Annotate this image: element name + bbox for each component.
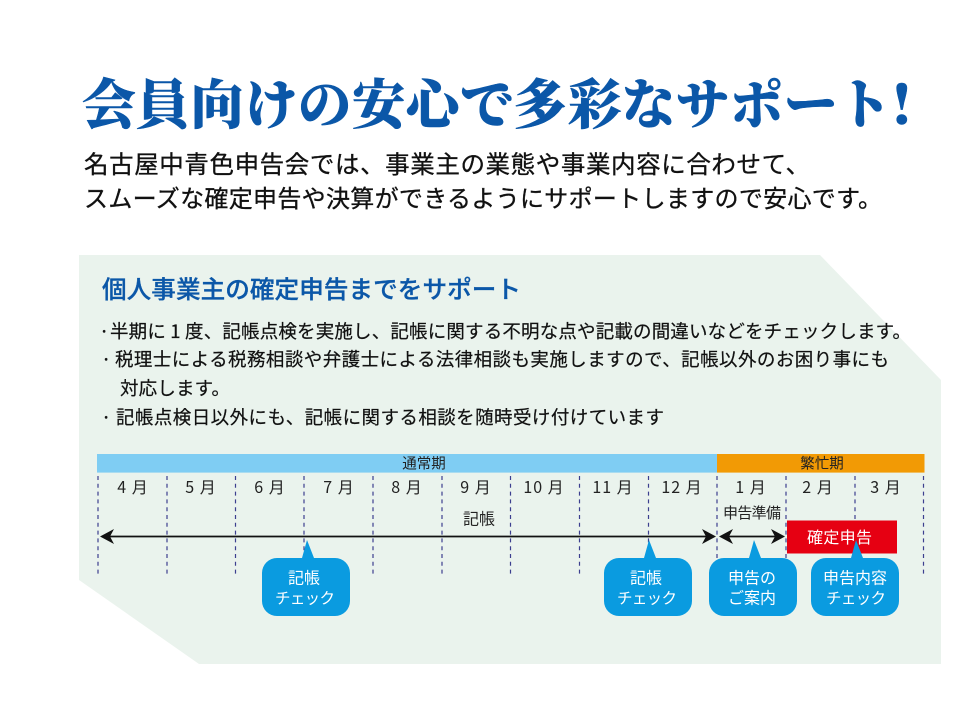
callout: filing content check: 申告内容 xyxy=(823,564,887,588)
panel heading: 個人事業主の確定申告までをサポート xyxy=(102,270,521,306)
callout: bookkeeping check 1 xyxy=(262,540,350,616)
callout: bookkeeping check 1: 記帳 xyxy=(288,564,320,588)
title: 会員向けの安心で多彩なサポート! xyxy=(82,62,912,140)
period bar: busy xyxy=(717,452,924,474)
month labels: 6 月 xyxy=(254,474,286,498)
month labels: 12 月 xyxy=(661,474,703,498)
tax filing box: 確定申告 xyxy=(807,524,872,548)
callout: filing guidance: ご案内 xyxy=(728,584,776,608)
month labels: 3 月 xyxy=(870,474,902,498)
bullet list xyxy=(99,318,911,430)
month labels: 11 月 xyxy=(592,474,634,498)
intro text xyxy=(84,146,882,214)
month labels: 4 月 xyxy=(117,474,149,498)
month labels: 8 月 xyxy=(391,474,423,498)
arrow: bookkeeping period xyxy=(100,529,716,544)
callout: bookkeeping check 2: 記帳 xyxy=(630,564,662,588)
timeline chart xyxy=(97,452,924,616)
month labels: 10 月 xyxy=(523,474,565,498)
label: filing preparation: 申告準備 xyxy=(723,502,781,523)
callout: filing content check: チェック xyxy=(826,586,886,608)
callout: filing content check xyxy=(811,540,899,616)
arrow: filing preparation period xyxy=(719,529,785,544)
month labels: 9 月 xyxy=(460,474,492,498)
bullet list: · xyxy=(99,318,109,344)
bullet list: 半期に 1 度、記帳点検を実施し、記帳に関する不明な点や記載の間違いなどをチェックします。 xyxy=(110,318,911,344)
period bar: regular: 通常期 xyxy=(402,452,446,474)
panel: support background xyxy=(79,255,941,664)
period bar: busy: 繁忙期 xyxy=(800,452,844,474)
tax filing box xyxy=(787,520,897,554)
month labels xyxy=(117,474,902,498)
callout: bookkeeping check 2 xyxy=(604,540,692,616)
label: bookkeeping: 記帳 xyxy=(463,506,495,530)
period bar: regular xyxy=(97,452,717,474)
month labels: 5 月 xyxy=(185,474,217,498)
callout: bookkeeping check 2: チェック xyxy=(617,586,677,608)
bullet list: · xyxy=(101,404,111,430)
bullet list: · xyxy=(101,346,111,372)
callout: filing guidance xyxy=(709,540,797,616)
callout: bookkeeping check 1: チェック xyxy=(275,586,335,608)
month labels: 2 月 xyxy=(802,474,834,498)
intro text: 名古屋中青色申告会では、事業主の業態や事業内容に合わせて、 xyxy=(84,146,810,181)
callout: filing guidance: 申告の xyxy=(728,564,776,588)
bullet list: 対応します。 xyxy=(120,375,230,401)
intro text: スムーズな確定申告や決算ができるようにサポートしますので安心です。 xyxy=(84,179,882,214)
bullet list: 税理士による税務相談や弁護士による法律相談も実施しますので、記帳以外のお困り事にも xyxy=(115,346,889,372)
month labels: 1 月 xyxy=(735,474,767,498)
month labels: 7 月 xyxy=(323,474,355,498)
bullet list: 記帳点検日以外にも、記帳に関する相談を随時受け付けています xyxy=(116,404,664,430)
